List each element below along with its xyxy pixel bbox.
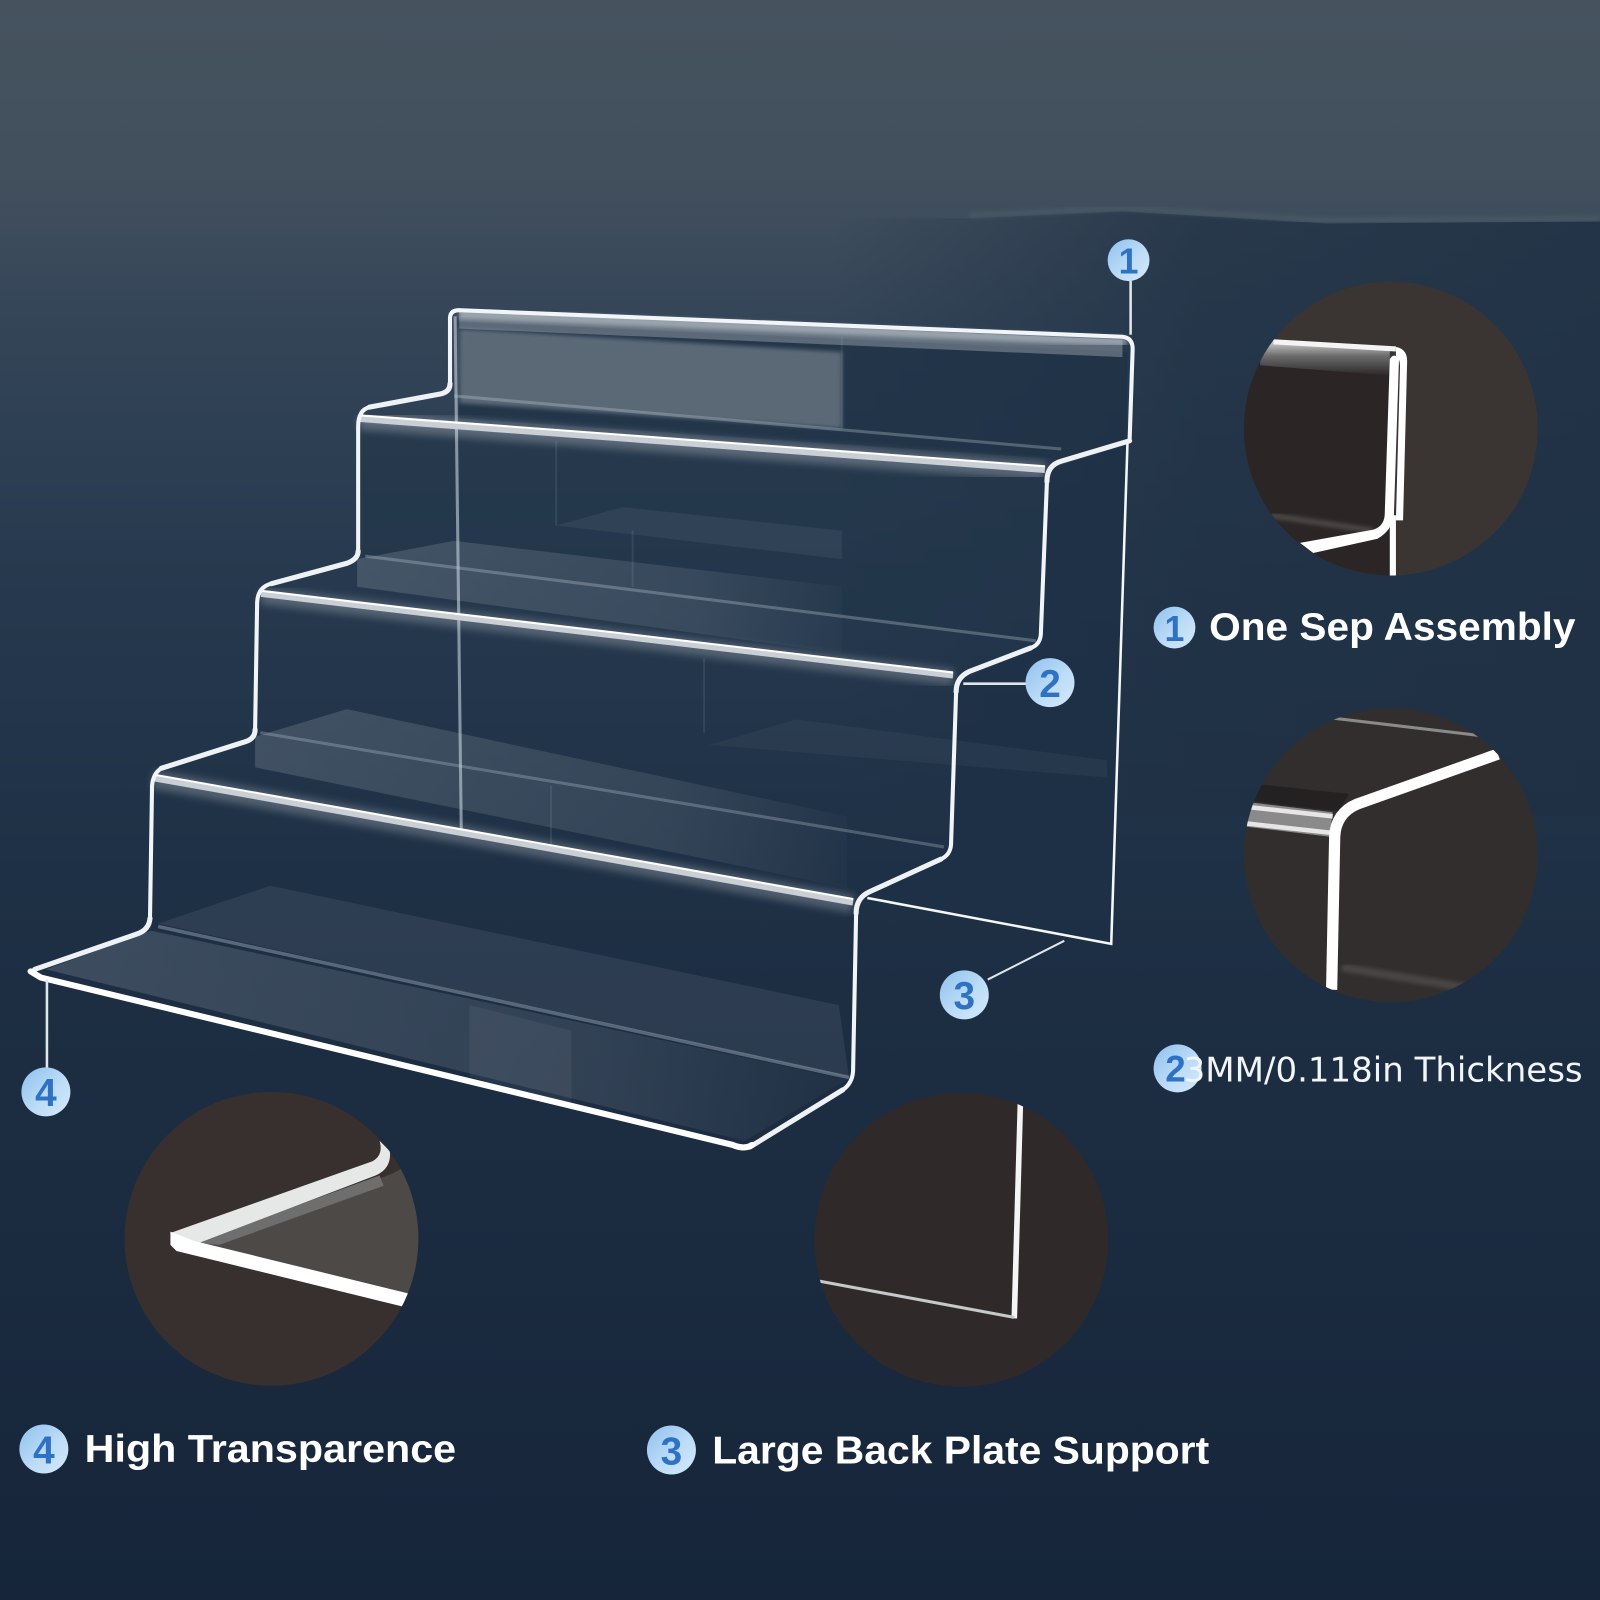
badge 2 on product	[1026, 658, 1074, 707]
callout 4 leader	[46, 980, 48, 1068]
badge 3 on product	[940, 970, 989, 1019]
caption 3: Large Back Plate Support: 3	[661, 1430, 682, 1473]
badge 4 on product	[21, 1067, 70, 1116]
badge 4 on product: 4	[35, 1072, 57, 1115]
caption 4: High Transparence: 4	[33, 1429, 55, 1472]
acrylic stair display riser	[31, 310, 1133, 1147]
faint inner lines	[158, 316, 1061, 1078]
detail circle 1: one-step top corner	[1224, 282, 1538, 582]
stair profile outline	[150, 310, 1133, 1090]
detail circle 3: back plate corner	[814, 1093, 1108, 1387]
badge 3 on product: 3	[954, 975, 975, 1018]
caption 4: High Transparence: High Transparence	[85, 1428, 456, 1471]
detail circle 4: front shelf corner	[124, 1092, 429, 1386]
badge 1 on product: 1	[1119, 241, 1139, 281]
caption 1: One Sep Assembly: 1	[1165, 609, 1184, 649]
detail circle 2: thickness corner	[1244, 708, 1538, 1002]
callout 1 leader	[1129, 281, 1132, 335]
front shelf edge	[31, 971, 752, 1147]
caption 2: thickness: 3MM/0.118in Thickness	[1184, 1051, 1583, 1091]
back plate edge	[867, 441, 1128, 944]
callout 2 leader	[963, 682, 1027, 685]
caption 2: thickness: 2	[1165, 1049, 1186, 1090]
callout 3 leader	[988, 941, 1064, 980]
tread front edges	[153, 314, 1128, 904]
caption 1: One Sep Assembly: One Sep Assembly	[1209, 606, 1576, 649]
badge 1 on product	[1108, 239, 1149, 281]
stair tread thick edges	[35, 384, 1130, 1147]
back plate and shelf glass	[46, 311, 1129, 1141]
caption 3: Large Back Plate Support: Large Back Plate Support	[712, 1429, 1209, 1472]
badge 2 on product: 2	[1039, 663, 1061, 706]
